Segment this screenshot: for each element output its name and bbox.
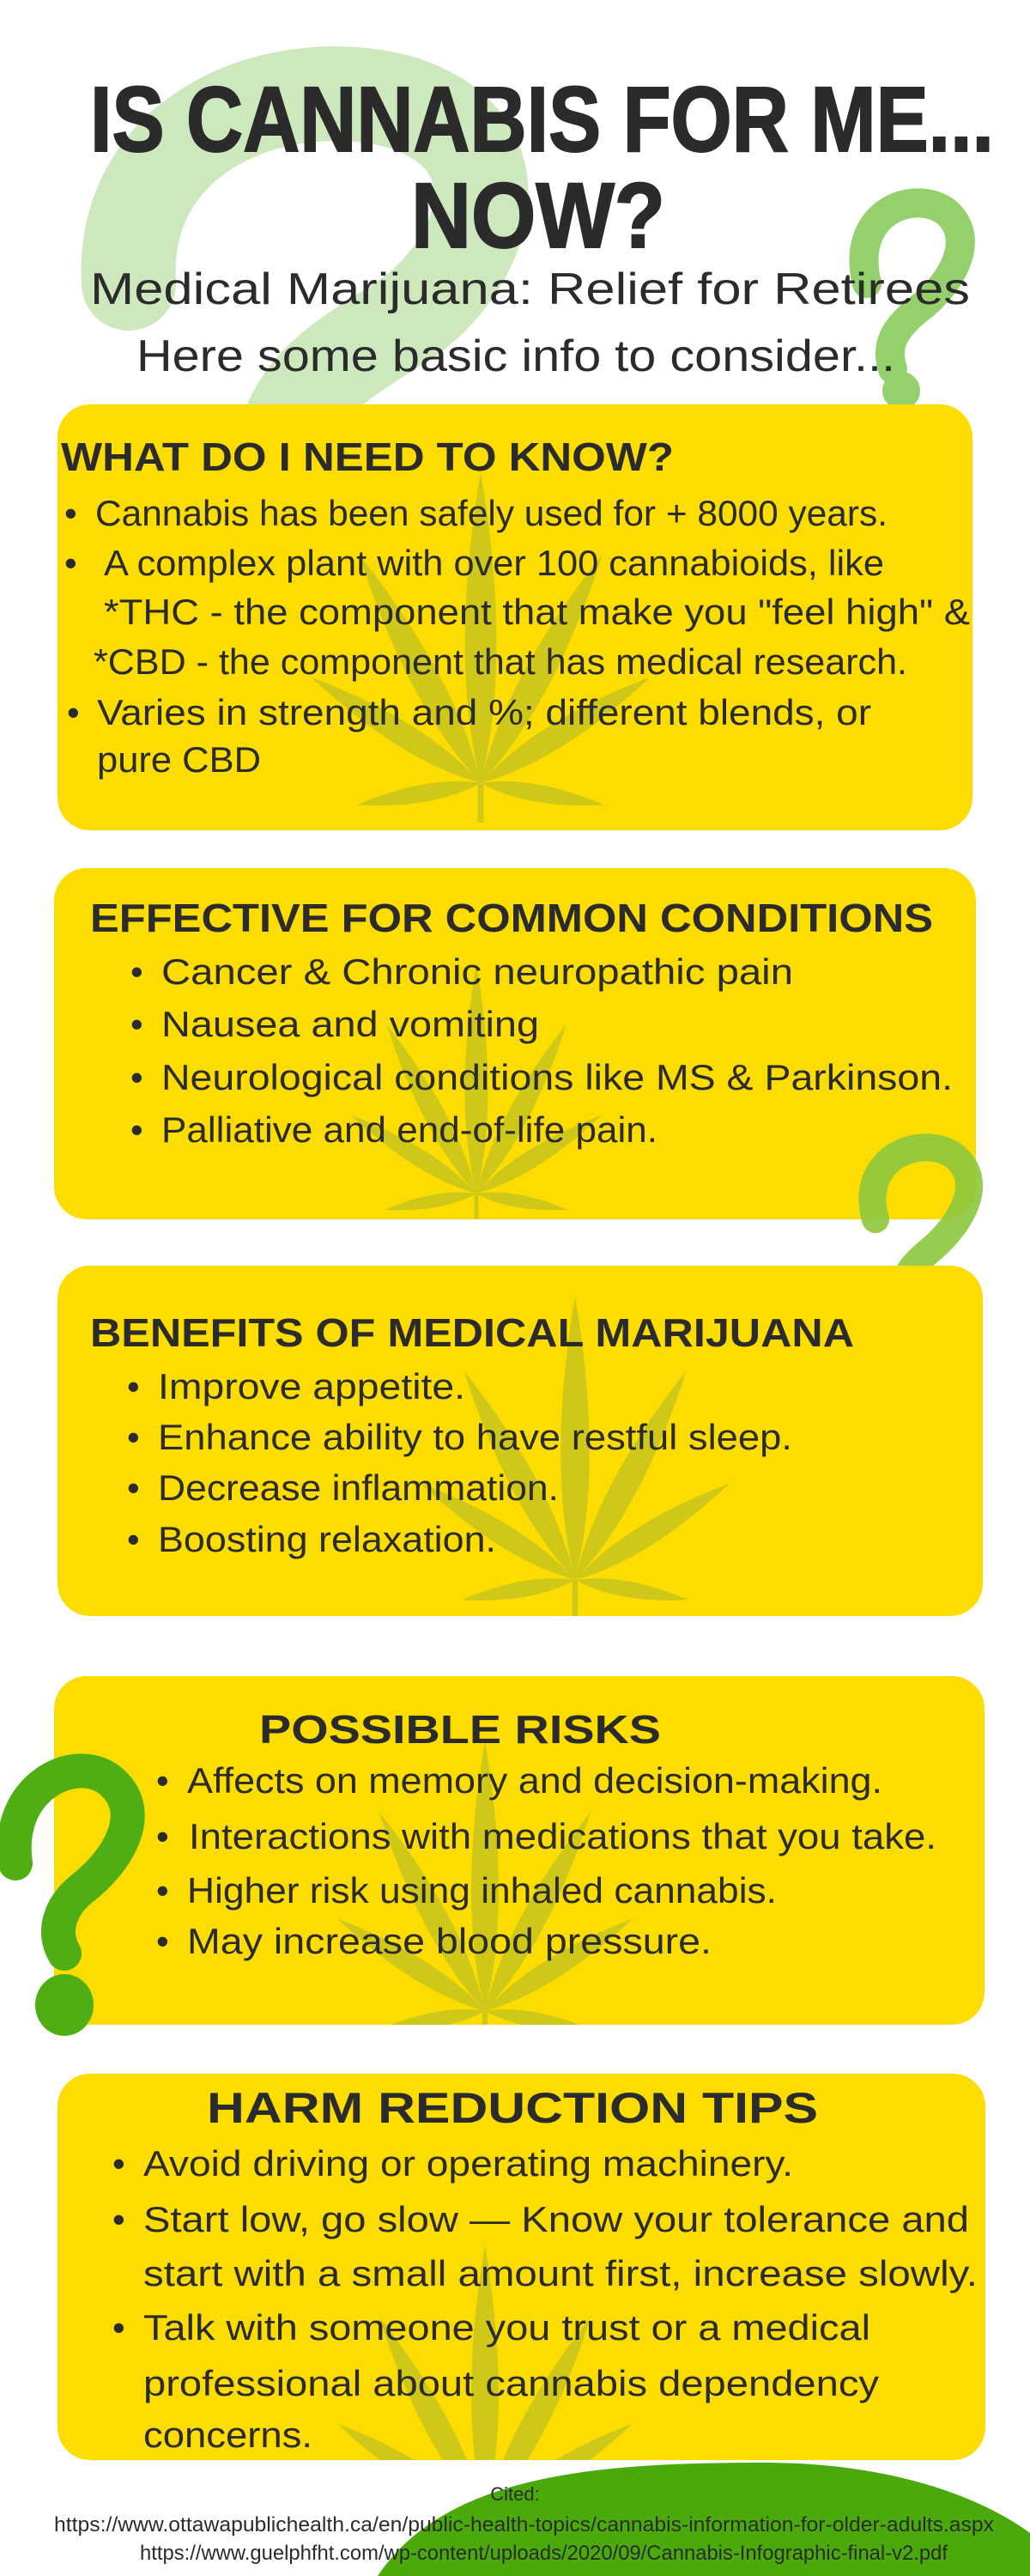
panel: what do I need to know: •	[64, 493, 77, 533]
panel: what do I need to know: WHAT DO I NEED TO KNOW?	[61, 434, 674, 479]
citations: https://www.guelphfht.com/wp-content/uploads/2020/09/Cannabis-Infographic-final-v2.pdf	[140, 2542, 948, 2565]
panel: effective for common conditions: Cancer & Chronic neuropathic pain	[161, 951, 793, 992]
panel: effective for common conditions: Nausea and vomiting	[161, 1004, 539, 1044]
intro text: Here some basic info to consider...	[136, 331, 895, 381]
citations	[54, 2483, 994, 2565]
icon: green question mark left	[15, 1771, 128, 2036]
panel: harm reduction tips: Avoid driving or operating machinery.	[143, 2143, 793, 2184]
panel: benefits of medical marijuana: Decrease inflammation.	[158, 1467, 559, 1508]
panel: benefits of medical marijuana: •	[127, 1467, 140, 1508]
panel: benefits of medical marijuana: Boosting relaxation.	[158, 1519, 496, 1559]
panel: benefits of medical marijuana: BENEFITS OF MEDICAL MARIJUANA	[90, 1310, 854, 1355]
panel: what do I need to know: Cannabis has been safely used for + 8000 years.	[95, 493, 888, 533]
panel: harm reduction tips: start with a small amount first, increase slowly.	[143, 2253, 978, 2293]
icon: green question mark middle right	[872, 1147, 969, 1321]
title: NOW?	[411, 163, 665, 267]
panel: possible risks: •	[156, 1760, 169, 1801]
panel: harm reduction tips: professional about cannabis dependency	[143, 2363, 879, 2403]
panel: harm reduction tips: concerns.	[143, 2415, 312, 2455]
panel: benefits of medical marijuana: Improve appetite.	[158, 1366, 465, 1406]
citations: Cited:	[490, 2483, 540, 2505]
panel: possible risks: •	[156, 1921, 169, 1961]
panel: possible risks: Affects on memory and decision-making.	[187, 1760, 882, 1801]
panel: possible risks: Interactions with medications that you take.	[189, 1816, 936, 1856]
panel: harm reduction tips: •	[112, 2307, 125, 2348]
panel: harm reduction tips: Start low, go slow — Know your tolerance and	[143, 2199, 969, 2239]
panel: possible risks: May increase blood pressure.	[187, 1921, 712, 1961]
panel: effective for common conditions: •	[130, 1004, 143, 1044]
panel: effective for common conditions: •	[130, 951, 143, 992]
panel: what do I need to know	[58, 404, 972, 830]
panel: possible risks: •	[156, 1816, 169, 1856]
panel: possible risks: Higher risk using inhaled cannabis.	[187, 1870, 777, 1911]
panel: effective for common conditions: Palliative and end-of-life pain.	[161, 1109, 657, 1150]
panel: what do I need to know: pure CBD	[97, 739, 261, 780]
panel: effective for common conditions: Neurological conditions like MS & Parkinson.	[161, 1057, 953, 1097]
icon: green question mark top right	[863, 203, 960, 410]
decorative green hill	[378, 2463, 1030, 2576]
panel: what do I need to know: •	[64, 543, 77, 583]
panel: what do I need to know: A complex plant with over 100 cannabioids, like	[104, 543, 884, 583]
panel: harm reduction tips: HARM REDUCTION TIPS	[207, 2084, 818, 2132]
panel: benefits of medical marijuana: •	[127, 1417, 140, 1457]
panel: possible risks: POSSIBLE RISKS	[259, 1707, 661, 1752]
panel: harm reduction tips	[58, 2074, 985, 2460]
panel: effective for common conditions: EFFECTIVE FOR COMMON CONDITIONS	[90, 896, 933, 940]
subtitle: Medical Marijuana: Relief for Retirees	[90, 264, 970, 314]
panel: possible risks	[54, 1676, 985, 2045]
panel: benefits of medical marijuana	[58, 1266, 983, 1616]
title	[90, 67, 994, 267]
panel: what do I need to know: Varies in strength and %; different blends, or	[97, 692, 871, 732]
panel: effective for common conditions: •	[130, 1109, 143, 1150]
panel: effective for common conditions: •	[130, 1057, 143, 1097]
panel: what do I need to know: *THC - the component that make you "feel high" &	[104, 592, 970, 632]
panel: benefits of medical marijuana: Enhance ability to have restful sleep.	[158, 1417, 792, 1457]
panel: harm reduction tips: •	[112, 2143, 125, 2184]
panel: harm reduction tips: Talk with someone you trust or a medical	[143, 2307, 870, 2348]
citations: https://www.ottawapublichealth.ca/en/public-health-topics/cannabis-information-for-older-adults.aspx	[54, 2513, 994, 2537]
panel: harm reduction tips: •	[112, 2199, 125, 2239]
panel: effective for common conditions	[54, 868, 976, 1223]
panel: benefits of medical marijuana: •	[127, 1366, 140, 1406]
icon: pale question mark background	[129, 94, 482, 489]
panel: what do I need to know: *CBD - the component that has medical research.	[94, 641, 907, 682]
panel: possible risks: •	[156, 1870, 169, 1911]
panel: benefits of medical marijuana: •	[127, 1519, 140, 1559]
panel: what do I need to know: •	[67, 692, 80, 732]
